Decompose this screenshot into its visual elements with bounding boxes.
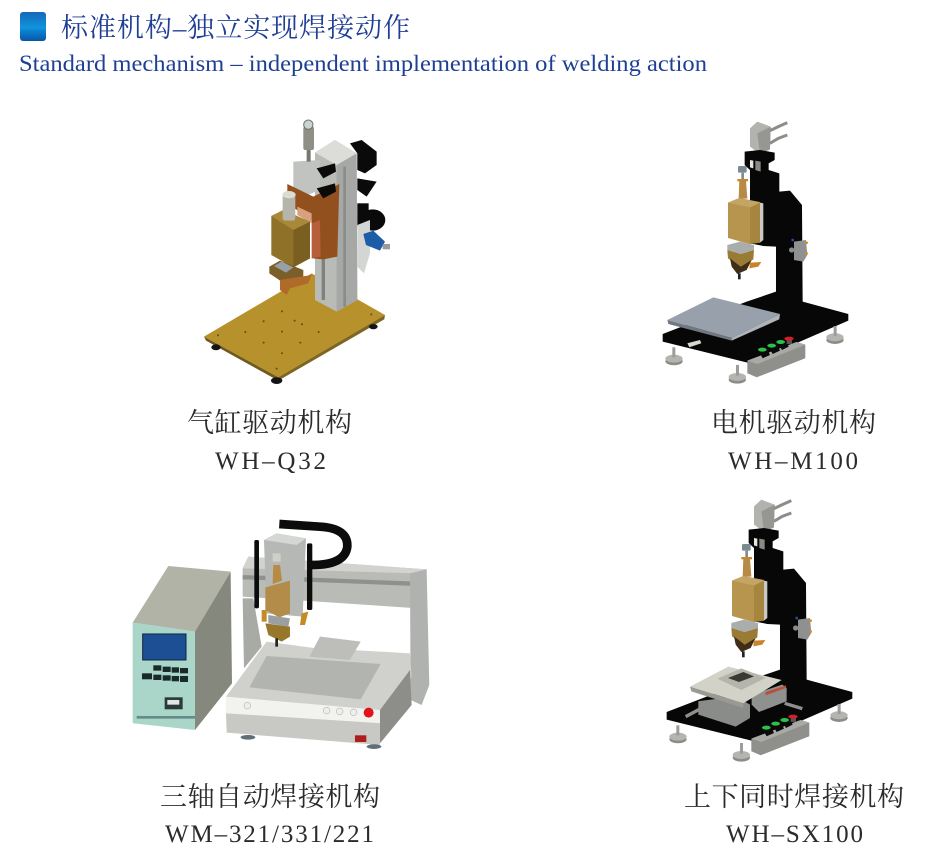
model: WH-M100: WH–M100 [728, 448, 858, 475]
label: 上下同时焊接机构: 上下同时焊接机构 [684, 782, 904, 812]
machine: three-axis automatic WM-321/331/221 [133, 524, 429, 749]
machine: motor driven WH-M100 [663, 122, 848, 384]
label: 电机驱动机构: 电机驱动机构 [711, 408, 876, 438]
model: WH-SX100: WH–SX100 [726, 821, 863, 848]
machine: simultaneous upper/lower WH-SX100 [667, 500, 852, 762]
model: WH-Q32: WH–Q32 [215, 448, 326, 475]
label: 三轴自动焊接机构: 三轴自动焊接机构 [160, 782, 380, 812]
label: 气缸驱动机构: 气缸驱动机构 [187, 408, 352, 438]
machine: cylinder driven WH-Q32 [204, 120, 390, 384]
title: 标准机构–独立实现焊接动作 [61, 13, 410, 43]
header icon: blue square [20, 12, 46, 41]
subtitle: Standard mechanism – independent implementation of welding action [19, 51, 708, 76]
model: WM-321/331/221: WM–321/331/221 [165, 821, 374, 848]
